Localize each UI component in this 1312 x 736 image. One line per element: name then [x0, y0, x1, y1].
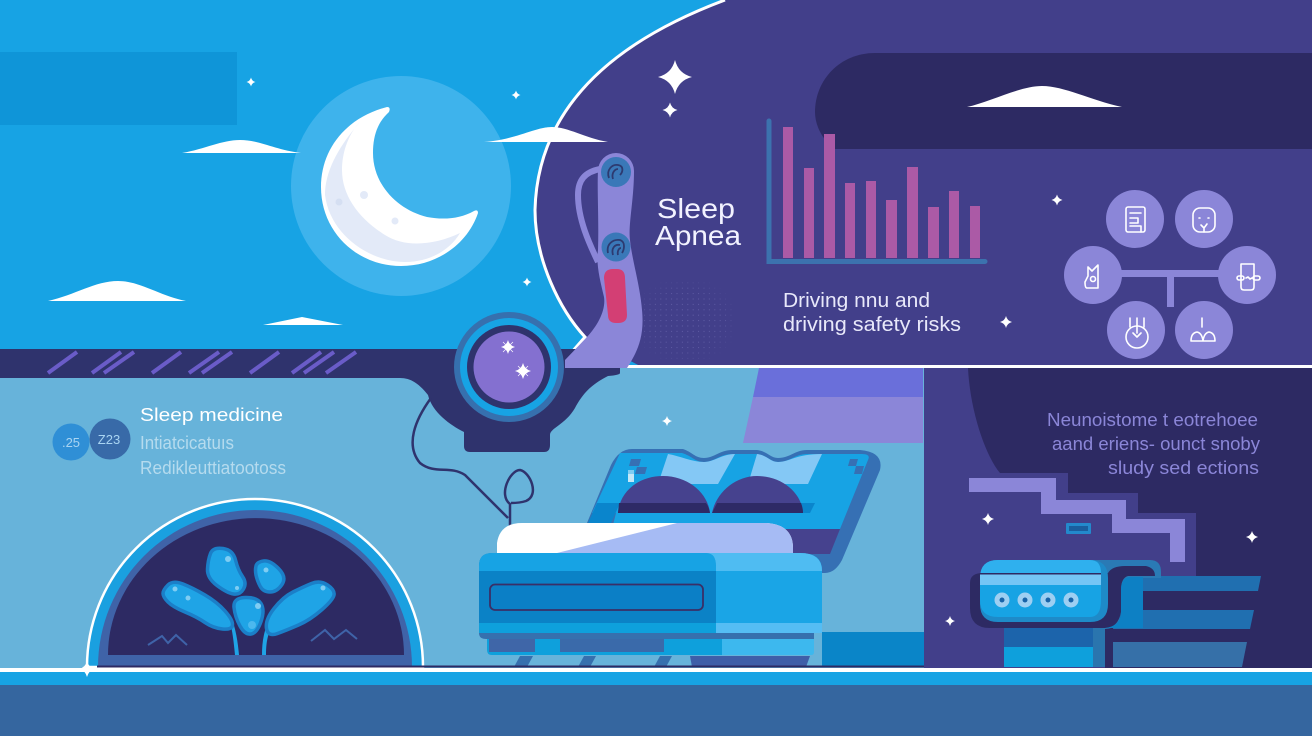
device: round lens — [454, 312, 564, 422]
device: headband arm with sensors — [565, 153, 643, 368]
bed legs — [514, 656, 810, 667]
sparkle — [982, 513, 994, 525]
footer: bottom lines — [0, 666, 1312, 736]
icon: moon with halo — [291, 76, 511, 296]
text: sleep medicine details: Redikleuttiatootoss — [140, 458, 286, 478]
heading: Sleep Apnea: Apnea — [655, 220, 741, 251]
mattress — [479, 553, 822, 655]
mountain marks — [148, 630, 357, 645]
sparkle — [246, 78, 256, 86]
panel: sleep apnea purple panel — [535, 0, 1312, 366]
text: lower right paragraph — [1047, 410, 1260, 478]
text: driving safety risks: driving safety risks — [783, 314, 961, 336]
icon: flask — [1126, 318, 1148, 348]
icon: face — [1193, 208, 1215, 232]
panel: dark banner top right — [815, 53, 1312, 149]
text: sleep medicine block — [52, 405, 286, 478]
cable and hose loop — [413, 398, 533, 528]
bed headboard — [587, 449, 881, 573]
text: driving safety risks — [783, 290, 961, 336]
text: driving safety risks: Driving nnu and — [783, 290, 930, 312]
heading: Sleep Apnea — [655, 193, 741, 251]
cloud: by the moon — [484, 127, 608, 142]
badge: dark blue: Z23 — [98, 432, 120, 447]
panel: sky background — [0, 0, 1312, 380]
sparkle — [522, 278, 532, 286]
badge: dark blue — [90, 418, 130, 460]
icon: dome with plant — [87, 499, 423, 667]
decorative band stripes — [48, 352, 356, 373]
icon: document — [1126, 207, 1145, 232]
badge: light blue: .25 — [62, 435, 80, 450]
cloud: upper left — [182, 140, 301, 153]
blanket — [497, 523, 793, 553]
panel: lower right purple — [924, 368, 1312, 668]
sparkle — [1246, 531, 1258, 543]
sparkle — [512, 90, 520, 100]
heading: sleep medicine: Sleep medicine — [140, 405, 283, 425]
cloud: lower left — [48, 281, 186, 301]
sparkle — [662, 102, 678, 118]
sparkle — [945, 616, 955, 626]
sparkle — [662, 416, 672, 426]
indicator: red strip — [604, 269, 627, 323]
panel: lavender stacked bands — [743, 368, 923, 443]
icon: airway — [1237, 264, 1260, 290]
icon: lungs — [1191, 318, 1215, 341]
cloud: small — [263, 317, 343, 325]
sparkle — [1052, 194, 1062, 206]
text: sleep medicine details: Intiatcicatuıs — [140, 433, 234, 453]
cloud: in dark banner — [967, 86, 1122, 107]
panel: dark band with machine base — [0, 349, 620, 452]
panel bottom line — [622, 365, 1312, 368]
heading: Sleep Apnea: Sleep — [657, 193, 735, 224]
text: lower right paragraph: aand eriens- ounct snoby — [1052, 434, 1260, 454]
text: lower right paragraph: Neunoistome t eotrehoee — [1047, 410, 1258, 430]
bed foot block — [822, 632, 924, 667]
decorative dot field — [644, 282, 732, 359]
device: CPAP machine with hose and shelves — [970, 560, 1261, 667]
panel outline — [535, 0, 725, 360]
sparkle — [79, 661, 95, 677]
icon: small chip — [1066, 523, 1091, 534]
device: bed — [479, 449, 924, 667]
icon: throat — [1085, 265, 1098, 288]
panel: lower left light blue — [0, 368, 924, 668]
bar chart — [769, 121, 985, 262]
sparkle — [1000, 316, 1012, 328]
icon network — [1064, 190, 1276, 359]
sensor: upper — [601, 157, 631, 187]
text: lower right paragraph: sludy sed ections — [1108, 458, 1259, 478]
plant leaves — [163, 548, 334, 655]
panel: lower right dark stepped region — [968, 368, 1312, 668]
sparkle — [658, 60, 692, 94]
panel: top-left darker block — [0, 52, 237, 125]
light stair ribbon — [969, 478, 1185, 562]
sensor: lower — [602, 232, 630, 262]
badge: light blue — [52, 424, 90, 460]
text: sleep medicine details — [140, 433, 286, 478]
pillows — [618, 476, 803, 513]
